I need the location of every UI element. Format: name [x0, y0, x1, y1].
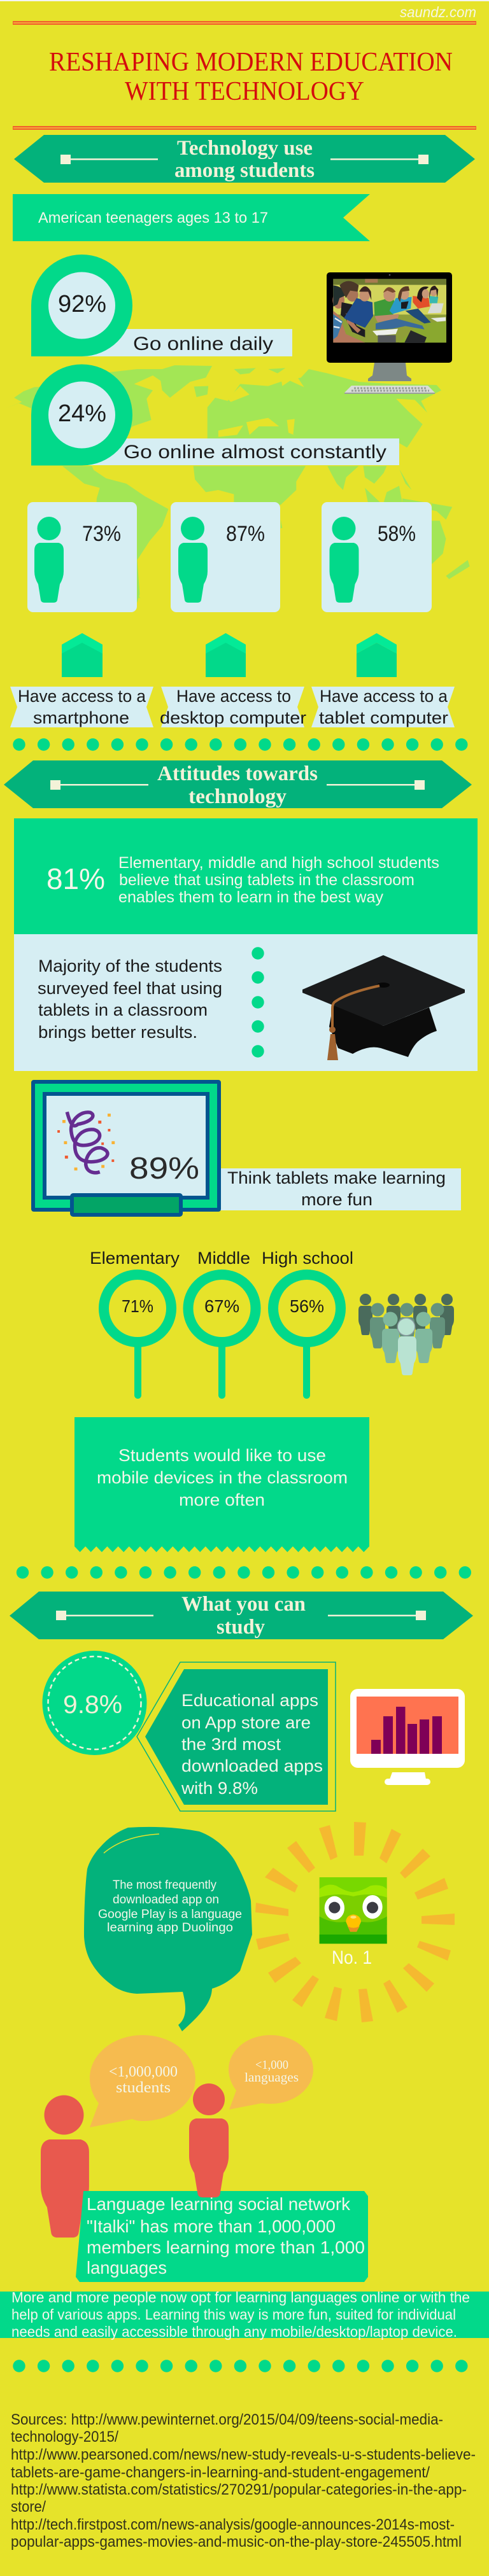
strip: summary text: More and more people now opt for learning languages online or with the — [11, 2289, 470, 2306]
icon: graduation cap — [302, 955, 465, 1060]
note: students would like to use mobile devices: Students would like to use — [118, 1446, 326, 1465]
stat pin: 24% go online almost constantly: 24% — [58, 400, 106, 427]
stat card: 58% tablet: 58% — [378, 522, 416, 546]
note: students would like to use mobile devices: mobile devices in the classroom — [97, 1468, 348, 1487]
speech bubble: 1,000 languages — [229, 2035, 313, 2110]
panel: majority of students: tablets in a classroom — [38, 1000, 208, 1019]
school level labels: Elementary — [90, 1249, 180, 1268]
speech bubble: most frequently downloaded app: downloaded app on — [113, 1893, 219, 1907]
section banner: technology use among students — [14, 135, 475, 183]
label ribbon: desktop: desktop computer — [160, 708, 306, 727]
panel: Italki language network — [76, 2191, 368, 2282]
world map background — [6, 365, 470, 603]
tablet — [404, 330, 427, 343]
badge: 9.8% — [42, 1651, 146, 1755]
figure: red person right — [189, 2083, 229, 2197]
sources: store/ — [11, 2498, 46, 2516]
panel: majority of students: surveyed feel that using — [38, 979, 222, 998]
monitor stand — [368, 363, 411, 381]
label ribbon: desktop: Have access to — [176, 687, 291, 706]
label bar: Think tablets make learning — [227, 1168, 446, 1187]
callout: educational apps: the 3rd most — [181, 1735, 281, 1754]
person 7 — [429, 296, 438, 304]
panel: 81% believe: enables them to learn in the best way — [118, 888, 383, 906]
tablet illustration — [33, 1082, 219, 1215]
speech bubble: most frequently downloaded app: learning app Duolingo — [107, 1921, 233, 1935]
watermark: saundz.com: saundz.com — [400, 4, 476, 20]
label bar: more fun — [301, 1190, 372, 1209]
speech bubble: 1,000,000 students: students — [116, 2080, 171, 2096]
label bar — [76, 438, 399, 465]
ribbon: American teenagers: American teenagers ages 13 to 17 — [38, 209, 268, 227]
panel: Italki language network: languages — [87, 2258, 167, 2278]
person 2 — [341, 302, 365, 337]
stat card: 73% smartphone: 73% — [82, 522, 121, 546]
person 6 — [413, 296, 430, 309]
lollipop stat: 67% — [188, 1275, 256, 1399]
speech bubble: 1,000 languages: languages — [244, 2071, 299, 2085]
callout: 89% think tablets make learning more fun — [33, 1082, 461, 1215]
icon: group of people — [358, 1294, 454, 1375]
callout: educational apps: downloaded apps — [181, 1756, 323, 1775]
up arrow: tablet — [357, 633, 397, 677]
strip: summary text — [0, 2289, 489, 2340]
icon: confetti streamer — [57, 1112, 115, 1173]
section banner: what you can study — [10, 1592, 473, 1639]
stat card: 73% smartphone — [27, 502, 137, 612]
sources: technology-2015/ — [11, 2428, 118, 2446]
sun rays around Duolingo icon — [255, 1822, 455, 2022]
label ribbon: desktop — [160, 687, 306, 727]
panel: 81% believe: Elementary, middle and high school students — [118, 854, 439, 872]
icon: Duolingo owl — [320, 1877, 387, 1943]
stat pin: 24% go online almost constantly — [31, 364, 399, 466]
person 1 — [333, 311, 365, 342]
section banner: attitudes towards technology — [4, 760, 472, 808]
up arrow: smartphone — [62, 633, 103, 677]
speech bubble: most frequently downloaded app — [84, 1827, 252, 2031]
person 5 — [390, 297, 412, 314]
label ribbon: smartphone: Have access to a — [18, 687, 146, 706]
dotted divider 1 — [13, 738, 468, 751]
speech bubble: most frequently downloaded app: Google Play is a language — [98, 1908, 242, 1921]
speech bubble: 1,000,000 students: <1,000,000 — [109, 2064, 178, 2080]
label ribbon: tablet: Have access to a — [320, 687, 448, 706]
panel: 81% believe: 81% — [46, 862, 105, 895]
lollipop stat: 71% — [104, 1275, 171, 1399]
speech bubble: most frequently downloaded app: The most frequently — [113, 1879, 216, 1892]
label: No. 1: No. 1 — [332, 1947, 372, 1968]
callout: educational apps: on App store are — [181, 1713, 311, 1732]
panel: majority of students: brings better results. — [38, 1023, 197, 1042]
section banner: what you can study: study — [216, 1616, 265, 1639]
bar chart — [371, 1707, 442, 1754]
laptop and paper — [428, 304, 444, 313]
stat card: 87% desktop — [171, 502, 280, 612]
lollipop stat: 67%: 67% — [204, 1296, 239, 1316]
panel: majority of students — [14, 934, 478, 1071]
section banner: attitudes towards technology: Attitudes towards — [157, 762, 318, 785]
callout: 89% think tablets make learning more fun: 89% — [129, 1152, 199, 1186]
person 4 — [374, 297, 396, 317]
section banner: technology use among students: among students — [174, 159, 315, 182]
up arrow: desktop — [206, 633, 246, 677]
callout: educational apps — [137, 1662, 336, 1811]
lollipop stat: 56%: 56% — [290, 1296, 324, 1316]
section banner: what you can study: What you can — [181, 1593, 306, 1616]
callout: educational apps: Educational apps — [181, 1691, 318, 1710]
school level labels: High school — [262, 1249, 353, 1268]
sources — [11, 2411, 476, 2551]
panel: Italki language network: members learning more than 1,000 — [87, 2237, 365, 2257]
panel: Italki language network: "Italki" has more than 1,000,000 — [87, 2216, 336, 2236]
vertical dots — [252, 947, 264, 1058]
stat pin: 92% go online daily — [31, 255, 292, 356]
label ribbon: smartphone: smartphone — [33, 708, 129, 727]
panel: majority of students: Majority of the students — [38, 956, 222, 976]
sources: tablets-are-game-changers-in-learning-and-student-engagement/ — [11, 2464, 430, 2481]
label bar — [220, 1168, 461, 1210]
label bar: Go online daily — [133, 333, 273, 354]
stat card: 58% tablet — [322, 502, 432, 612]
speech bubble: 1,000 languages: <1,000 — [255, 2058, 288, 2072]
sources: http://www.statista.com/statistics/270291/popular-categories-in-the-app- — [11, 2481, 467, 2498]
lollipop stat: 71%: 71% — [122, 1296, 153, 1316]
stat card: 87% desktop: 87% — [226, 522, 265, 546]
section banner: technology use among students: Technology use — [177, 137, 313, 160]
icon: monitor with bar chart — [350, 1689, 465, 1785]
school level labels — [90, 1249, 353, 1268]
label ribbon: smartphone — [10, 687, 153, 727]
sources: Sources: http://www.pewinternet.org/2015/04/09/teens-social-media- — [11, 2411, 443, 2428]
note: students would like to use mobile devices: more often — [179, 1490, 265, 1509]
label ribbon: tablet: tablet computer — [319, 708, 448, 727]
callout: educational apps: with 9.8% — [181, 1779, 258, 1798]
strip: summary text: needs and easily accessible through any mobile/desktop/laptop device. — [11, 2323, 457, 2340]
panel: Italki language network: Language learning social network — [87, 2194, 351, 2214]
keyboard — [344, 386, 435, 394]
section banner: attitudes towards technology: technology — [188, 785, 287, 808]
badge: 9.8%: 9.8% — [63, 1691, 122, 1719]
school level labels: Middle — [197, 1249, 250, 1268]
title block — [13, 21, 476, 130]
dotted divider 2 — [17, 1566, 471, 1579]
figure: red person left — [41, 2095, 89, 2237]
desktop monitor with student photo — [327, 272, 452, 394]
sources: http://tech.firstpost.com/news-analysis/google-announces-2014s-most- — [11, 2516, 455, 2533]
ribbon: American teenagers — [13, 194, 370, 241]
panel: 81% believe — [14, 818, 478, 934]
label ribbon: tablet — [311, 687, 455, 727]
person 3 — [344, 298, 373, 328]
dotted divider 3 — [13, 2360, 468, 2372]
sources: popular-apps-games-movies-and-music-on-the-play-store-245505.html — [11, 2533, 462, 2551]
lollipop stat: 56% — [273, 1275, 341, 1399]
map sea cut-outs — [218, 375, 304, 437]
title block: WITH TECHNOLOGY — [125, 77, 364, 106]
panel: 81% believe: believe that using tablets in the classroom — [119, 871, 415, 889]
strip: summary text: help of various apps. Learning this way is more fun, suited for individual — [11, 2306, 456, 2323]
label bar — [76, 329, 292, 356]
stat pin: 92% go online daily: 92% — [58, 291, 106, 318]
label bar: Go online almost constantly — [124, 442, 386, 463]
speech bubble: 1,000,000 students — [90, 2035, 195, 2127]
student group photo — [332, 279, 446, 343]
title block: RESHAPING MODERN EDUCATION — [49, 48, 453, 77]
note: students would like to use mobile devices — [74, 1417, 369, 1552]
